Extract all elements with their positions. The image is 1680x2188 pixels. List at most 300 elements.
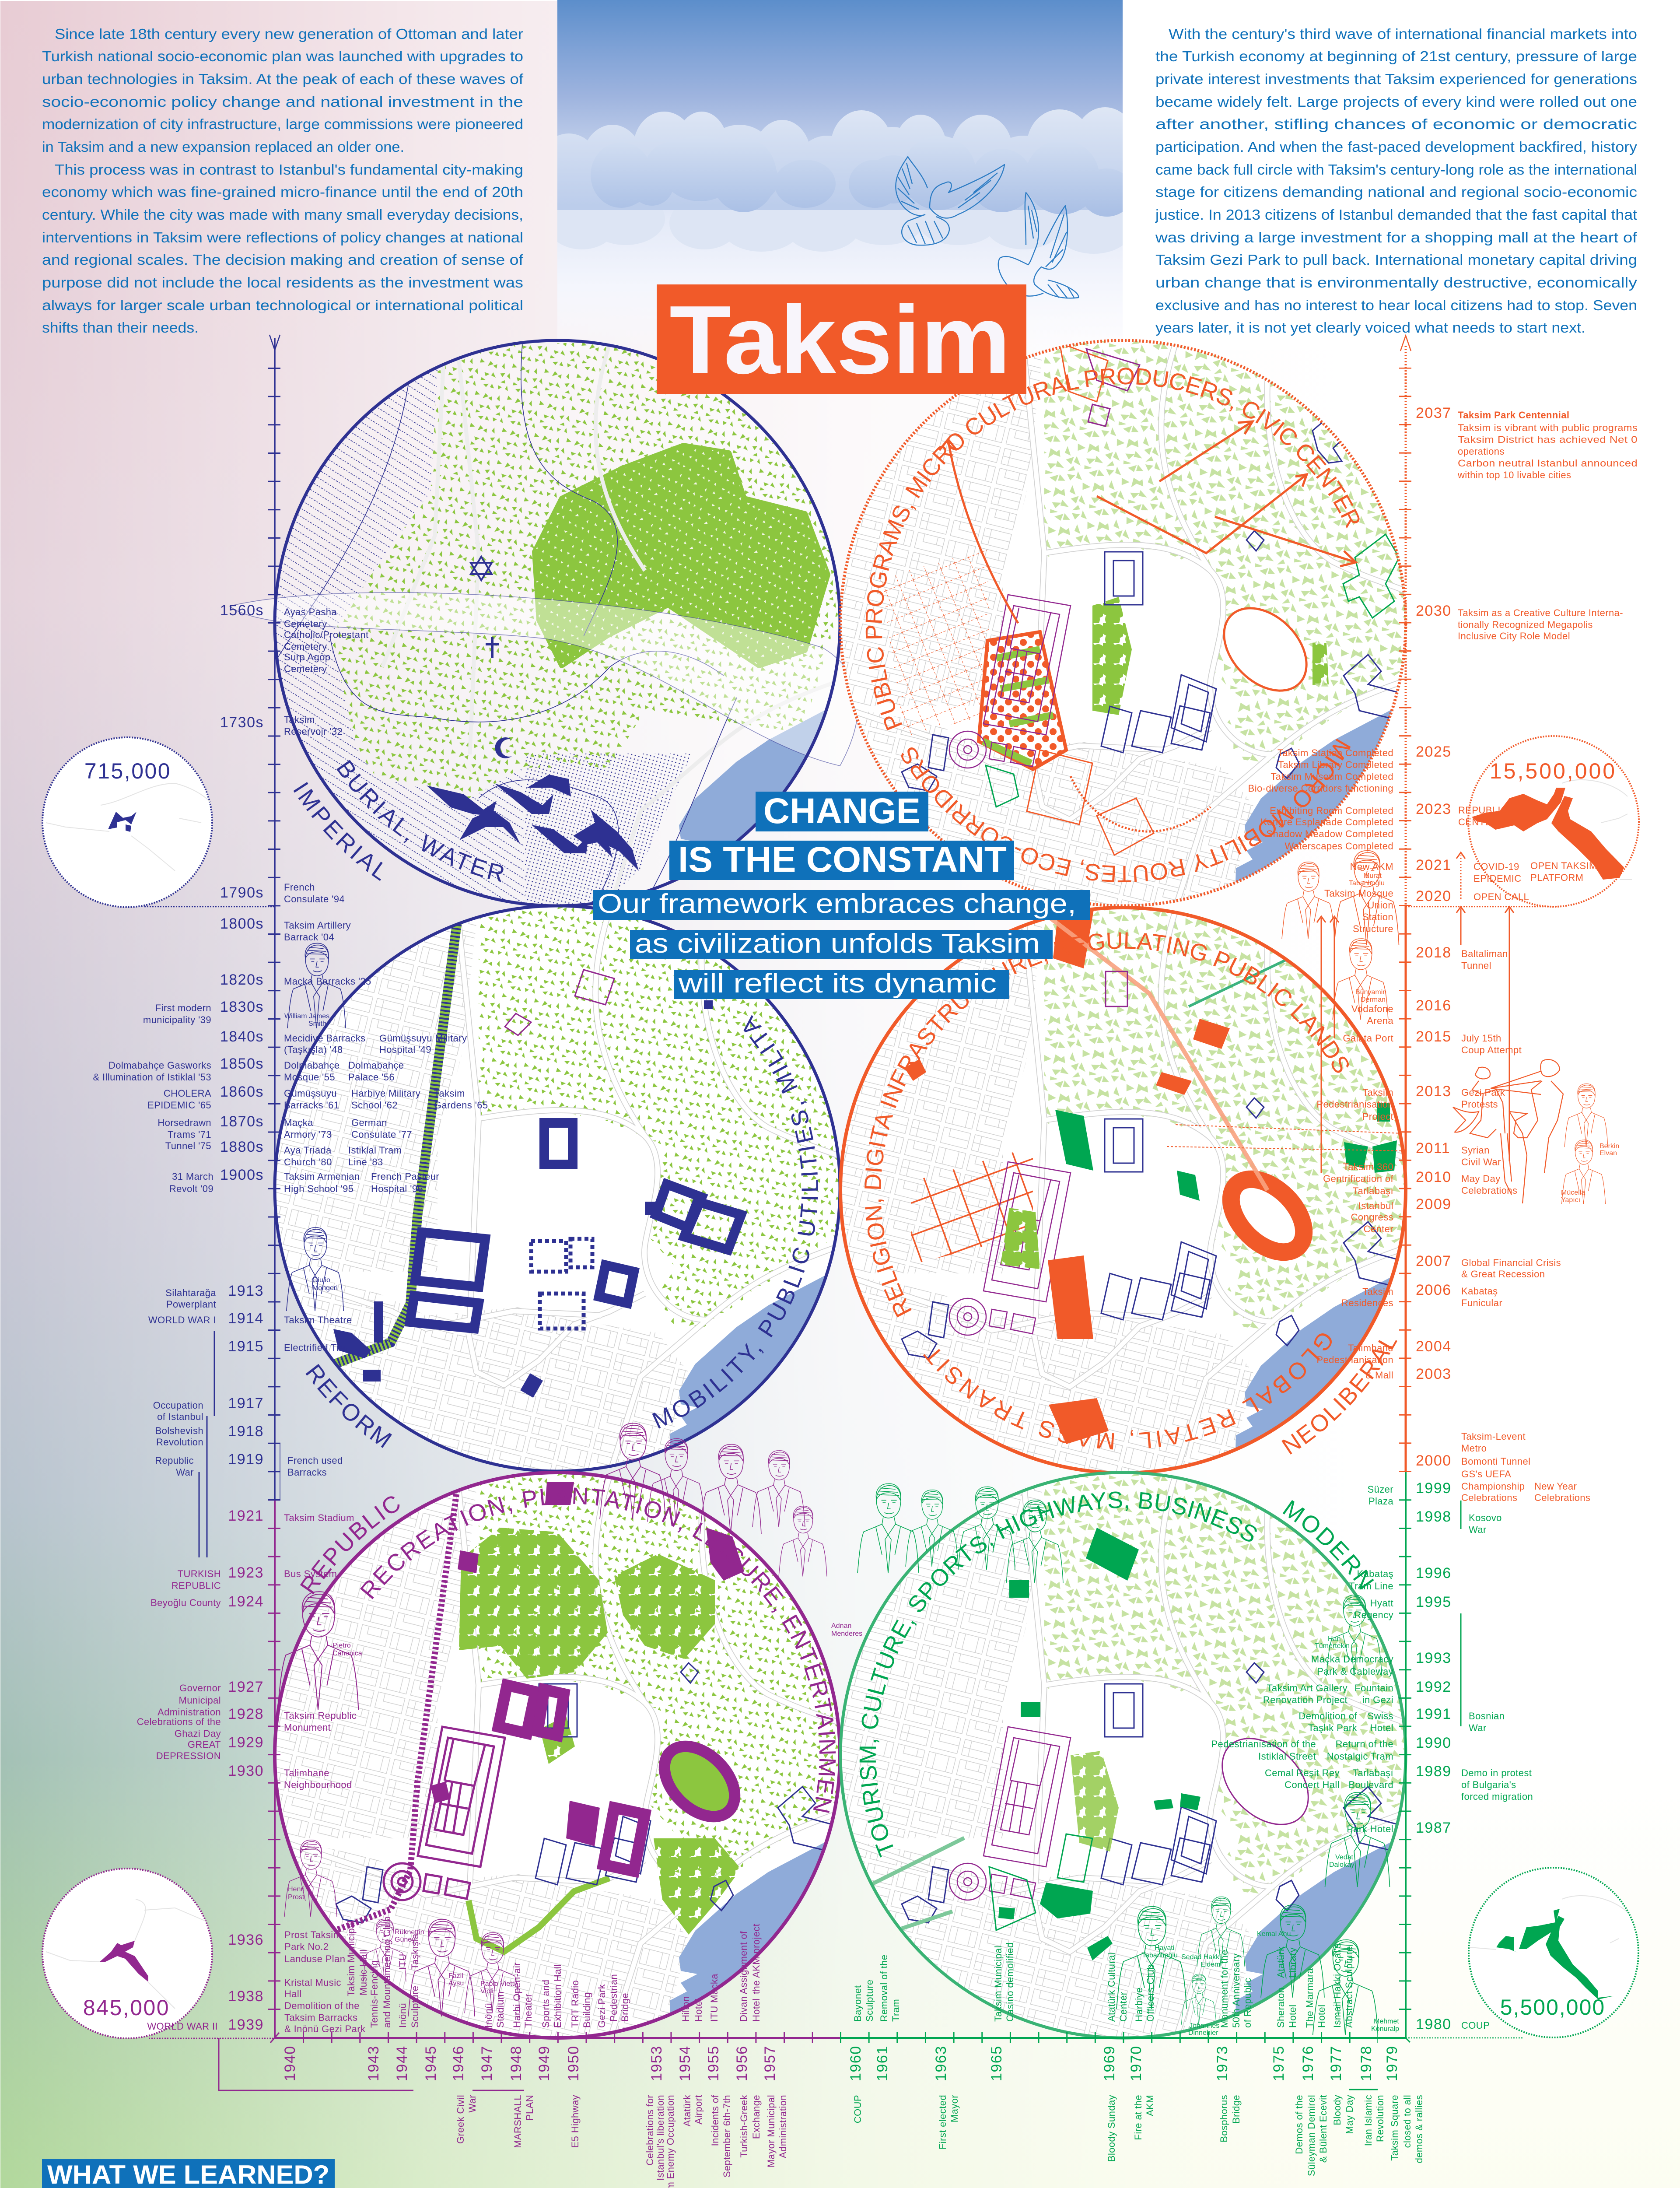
purple outline buildings bbox=[1086, 349, 1140, 426]
rotated years bottom purple: 1948 bbox=[508, 2045, 525, 2081]
timeline years left purple: 1927 bbox=[228, 1679, 264, 1695]
rotated years bottom green: 1970 bbox=[1128, 2045, 1144, 2081]
timeline events left of left axis navy: EPIDEMIC '65 bbox=[147, 1100, 211, 1111]
water bbox=[670, 689, 864, 929]
rotated notes below axis green: Taksim Square bbox=[1389, 2095, 1400, 2161]
portrait names: Menderes bbox=[831, 1630, 862, 1637]
rotated notes below axis green: COUP bbox=[852, 2095, 863, 2123]
timeline years right orange: 2013 bbox=[1416, 1083, 1452, 1100]
rotated years bottom purple: 1954 bbox=[677, 2045, 693, 2081]
rotated events above bottom axis purple: Music Hall bbox=[358, 1950, 369, 1995]
timeline events right of left axis navy: Maçka Barracks '25 bbox=[284, 976, 371, 987]
timeline events right of left axis navy: High School '95 bbox=[284, 1183, 354, 1194]
hatched burial grounds bbox=[273, 339, 525, 908]
timeline years left purple bbox=[228, 1508, 264, 2033]
timeline events left of left axis navy: Trams '71 bbox=[168, 1129, 211, 1140]
timeline years left navy: 1900s bbox=[220, 1167, 264, 1183]
rotated events above bottom axis green: Casino demolified bbox=[1004, 1942, 1015, 2022]
rotated events above bottom axis green: Sculpture bbox=[864, 1979, 875, 2022]
rotated events above bottom axis green: Hotel bbox=[1316, 2005, 1327, 2028]
timeline events left of right axis green: Fountain bbox=[1354, 1683, 1393, 1694]
stadium outline bbox=[1208, 592, 1323, 707]
portrait names: Johannes bbox=[1189, 2022, 1219, 2030]
intro text block left: and regional scales. The decision making and creation of sense of bbox=[42, 252, 524, 268]
timeline years left purple: 1939 bbox=[228, 2016, 264, 2033]
timeline events right of left axis navy: Cemetery bbox=[284, 641, 327, 652]
timeline events purple left: Celebrations of the bbox=[137, 1716, 221, 1727]
timeline events purple right: Hall bbox=[284, 1988, 302, 1999]
rotated notes below axis green: Süleyman Demirel bbox=[1306, 2095, 1317, 2176]
arc text: religion: RELIGION, DIGITA INFRASTRUCTURE, REGULATING PUBLIC LANDS bbox=[860, 927, 1355, 1322]
timeline events right of left axis navy: Armory '73 bbox=[284, 1129, 332, 1140]
frame bbox=[275, 1473, 840, 2038]
rotated events above bottom axis purple: Theater bbox=[523, 1993, 534, 2028]
timeline notes right green: War bbox=[1469, 1722, 1487, 1733]
timeline years left navy: 1917 bbox=[228, 1395, 264, 1412]
portrait names: Tabanlıoğlu bbox=[1349, 880, 1385, 887]
timeline events right of left axis navy: Surp Agop bbox=[284, 652, 330, 663]
intro text block left: This process was in contrast to Istanbul's fundamental city-making bbox=[55, 161, 523, 178]
portrait names: Paolo Vietti bbox=[480, 1980, 516, 1988]
arc text: mobility: MOBILITY, PUBLIC UTILITIES, MILITARY bbox=[0, 0, 823, 1434]
rotated events above bottom axis green: Tram bbox=[890, 1999, 901, 2022]
rotated events above bottom axis purple bbox=[346, 1916, 762, 2028]
timeline years left navy: 1790s bbox=[220, 884, 264, 901]
timeline events left of left axis navy: War bbox=[176, 1467, 194, 1478]
icon: star bbox=[471, 557, 492, 580]
timeline events right of left axis navy: Barrack '04 bbox=[284, 932, 334, 943]
timeline events right of left axis navy: Taksim Theatre bbox=[284, 1315, 352, 1325]
portrait names: William James bbox=[284, 1013, 329, 1020]
timeline events left of right axis orange: Gentrification of bbox=[1323, 1173, 1393, 1184]
timeline notes right orange: GS's UEFA bbox=[1461, 1469, 1511, 1480]
timeline axis bottom bbox=[219, 2033, 1410, 2090]
diagonal orange grid bbox=[880, 549, 992, 737]
timeline notes right orange: OPEN CALL bbox=[1474, 891, 1529, 902]
rotated years bottom purple: 1955 bbox=[705, 2045, 722, 2081]
intro text block right: Taksim Gezi Park to pull back. International monetary capital driving bbox=[1155, 252, 1637, 268]
timeline notes right orange: Protests bbox=[1461, 1099, 1498, 1110]
rotated notes below axis purple: MARSHALL bbox=[512, 2095, 523, 2148]
timeline events left of right axis orange: Taksim Library Completed bbox=[1278, 759, 1393, 770]
timeline events purple right: Taksim Republic bbox=[284, 1710, 357, 1721]
rotated events above bottom axis green: Abstract Sculpture bbox=[1344, 1946, 1354, 2028]
rotated events above bottom axis green: Removal of the bbox=[878, 1954, 889, 2022]
timeline events left of right axis green: Boulevard bbox=[1348, 1779, 1393, 1790]
population bubble 5,500,000: 5,500,000 bbox=[1500, 1995, 1605, 2020]
timeline years right green: 1995 bbox=[1416, 1594, 1452, 1610]
polka tree block bbox=[979, 632, 1066, 769]
intro text block left: century. While the city was made with many small everyday decisions, bbox=[42, 207, 523, 223]
frame bbox=[840, 1473, 1406, 2038]
rotated notes below axis green: Bosphorus bbox=[1218, 2095, 1229, 2142]
rotated notes below axis green: Iran Islamic bbox=[1363, 2095, 1374, 2146]
central message: change is the constant: IS THE CONSTANT bbox=[678, 840, 1007, 880]
rotated events above bottom axis purple: TRT Radio bbox=[570, 1980, 581, 2028]
rotated events above bottom axis green: Harbiye bbox=[1134, 1987, 1144, 2022]
timeline events left of right axis orange: Exhibiting Room Completed bbox=[1270, 805, 1393, 816]
portrait names: Tümertekin bbox=[1315, 1642, 1350, 1650]
timeline years left navy: 1880s bbox=[220, 1139, 264, 1155]
purple outlines bbox=[505, 970, 614, 1035]
central message: change is the constant bbox=[593, 791, 1090, 999]
timeline years right orange: 2020 bbox=[1416, 888, 1452, 905]
solid green buildings bbox=[998, 1528, 1200, 1960]
timeline years right green bbox=[1416, 1480, 1452, 2033]
timeline years left navy: 1560s bbox=[220, 602, 264, 619]
dotted small blocks bbox=[531, 1239, 592, 1329]
timeline notes right green: forced migration bbox=[1461, 1791, 1533, 1802]
timeline years right orange: 2010 bbox=[1416, 1169, 1452, 1185]
timeline events right of left axis navy: Palace '56 bbox=[348, 1072, 395, 1083]
timeline years right orange: 2011 bbox=[1416, 1140, 1450, 1157]
timeline events purple right: Kristal Music bbox=[284, 1977, 341, 1988]
timeline events left of right axis green: Concert Hall bbox=[1284, 1779, 1340, 1790]
timeline events right of left axis navy: Istiklal Tram bbox=[348, 1145, 402, 1156]
rotated events above bottom axis purple: Hilton bbox=[680, 1996, 691, 2022]
green outline buildings bbox=[986, 534, 1399, 807]
timeline events purple right: & Inönü Gezi Park bbox=[284, 2023, 366, 2034]
peach road and lines bbox=[1040, 910, 1267, 1190]
intro text block left: economy which was fine-grained micro-finance until the end of 20th bbox=[42, 184, 523, 200]
intro text block right: came back full circle with Taksim's century-long role as the international bbox=[1155, 161, 1637, 178]
arc text: tourism: TOURISM, CULTURE, SPORTS, HIGHWAYS, BUSINESS bbox=[855, 1487, 1262, 1860]
timeline events purple right: Bus System bbox=[284, 1568, 337, 1579]
timeline notes right orange: Kabataş bbox=[1461, 1286, 1498, 1297]
arc text: global retail: GLOBAL RETAIL, MASS TRANSIT bbox=[917, 1326, 1339, 1455]
timeline years left navy bbox=[220, 602, 264, 1468]
green planting strips bbox=[983, 649, 1053, 763]
timeline notes right orange: Metro bbox=[1461, 1443, 1487, 1454]
timeline notes right orange: Tunnel bbox=[1461, 960, 1491, 971]
rotated years bottom purple: 1943 bbox=[365, 2045, 382, 2081]
timeline events right of left axis navy: Ayas Pasha bbox=[284, 607, 337, 617]
timeline years left navy: 1730s bbox=[220, 714, 264, 731]
intro text block right bbox=[1155, 26, 1638, 336]
timeline events purple right: Prost Taksim bbox=[284, 1929, 341, 1940]
timeline events purple right: Taksim Barracks bbox=[284, 2012, 357, 2023]
icon: crescent bbox=[495, 737, 512, 758]
portrait names: Sedad Hakki bbox=[1181, 1953, 1221, 1961]
intro text block left: modernization of city infrastructure, large commissions were pioneered bbox=[42, 116, 523, 132]
rotated years bottom purple: 1957 bbox=[762, 2045, 778, 2081]
rotated years bottom purple: 1945 bbox=[423, 2045, 439, 2081]
timeline years right orange: 2015 bbox=[1416, 1028, 1452, 1045]
timeline years right orange: 2030 bbox=[1416, 603, 1452, 619]
timeline years right orange: 2023 bbox=[1416, 801, 1452, 817]
portrait names: Henri bbox=[288, 1886, 304, 1893]
frame bbox=[840, 908, 1406, 1473]
rotated events above bottom axis purple: the AKM project bbox=[751, 1924, 762, 1994]
timeline events left of right axis orange: Pedestrianisation bbox=[1316, 1354, 1393, 1365]
intro text block right: after another, stifling chances of economic or democratic bbox=[1155, 116, 1637, 132]
rotated events above bottom axis purple: Taksim Municipal bbox=[346, 1920, 357, 1996]
rotated notes below axis green: Bridge bbox=[1231, 2095, 1242, 2124]
timeline events right of left axis navy: Hospital '96 bbox=[371, 1183, 423, 1194]
rotated years bottom purple: 1953 bbox=[648, 2045, 665, 2081]
portrait names: Kemal Ahu bbox=[1257, 1930, 1291, 1938]
timeline events left of left axis navy: municipality '39 bbox=[143, 1014, 211, 1025]
timeline events right of left axis navy: Line '83 bbox=[348, 1157, 383, 1168]
rotated notes below axis purple: Airport bbox=[693, 2095, 704, 2125]
timeline events right of left axis navy: Taksim Artillery bbox=[284, 920, 351, 931]
timeline events left of left axis navy: Dolmabahçe Gasworks bbox=[108, 1060, 211, 1071]
rotated years bottom green: 1960 bbox=[847, 2045, 864, 2081]
timeline notes right green: of Bulgaria's bbox=[1461, 1779, 1516, 1790]
intro text block right: stage for citizens demanding national and regional socio-economic bbox=[1155, 184, 1637, 200]
timeline notes right orange: Taksim District has achieved Net 0 bbox=[1458, 434, 1638, 445]
timeline events purple left: TURKISH bbox=[178, 1568, 221, 1579]
timeline years right green: 1992 bbox=[1416, 1679, 1452, 1695]
timeline events right of left axis navy: Barracks bbox=[287, 1467, 327, 1478]
portrait names: Berkin bbox=[1600, 1143, 1619, 1150]
timeline events right of left axis navy: Reservoir '32 bbox=[284, 726, 343, 737]
portrait names: Mehmet bbox=[1374, 2018, 1399, 2025]
timeline years right orange: 2025 bbox=[1416, 743, 1452, 760]
portrait names: Canonica bbox=[332, 1650, 362, 1657]
timeline years right orange: 2018 bbox=[1416, 944, 1452, 961]
rotated events above bottom axis green: Library bbox=[1287, 1947, 1298, 1978]
timeline events right of left axis navy: Dolmabahçe bbox=[348, 1060, 404, 1071]
timeline events right of left axis navy: Church '80 bbox=[284, 1157, 332, 1168]
rotated events above bottom axis purple: Bridge bbox=[620, 1993, 630, 2022]
portrait names: Eldem bbox=[1200, 1961, 1220, 1968]
rotated events above bottom axis green: Monument for the bbox=[1219, 1950, 1230, 2028]
portrait names: Violi bbox=[480, 1988, 494, 1995]
population bubble 845,000 bbox=[42, 1869, 275, 2038]
circle map: neoliberal future micro programmes bbox=[839, 339, 1429, 929]
timeline events purple left: Ghazi Day bbox=[175, 1728, 221, 1739]
timeline events right of left axis navy: Gardens '65 bbox=[434, 1100, 488, 1111]
portraits purple bbox=[278, 1423, 827, 2016]
rotated years bottom purple: 1947 bbox=[479, 2045, 495, 2081]
central message: change is the constant: will reflect its dynamic bbox=[678, 968, 997, 999]
timeline events left of right axis orange: Arena bbox=[1367, 1015, 1393, 1026]
timeline events left of left axis navy: Silahtarağa bbox=[165, 1287, 216, 1298]
intro text block right: years later, it is not yet clearly voiced what needs to start next. bbox=[1155, 319, 1586, 336]
portrait names: Adnan bbox=[831, 1622, 851, 1630]
timeline events left of right axis orange: Galata Port bbox=[1343, 1033, 1393, 1044]
timeline notes right orange bbox=[1457, 410, 1638, 1503]
portrait names: Giulio bbox=[312, 1276, 330, 1284]
arc text: public programs: PUBLIC PROGRAMS, MICRO CULTURAL PRODUCERS, CIVIC CENTER bbox=[861, 363, 1366, 734]
timeline events purple right: Park No.2 bbox=[284, 1941, 329, 1952]
timeline events left of left axis navy: Powerplant bbox=[166, 1299, 216, 1310]
central message: change is the constant: Our framework embraces change, bbox=[598, 889, 1076, 919]
timeline years right orange: 2009 bbox=[1416, 1196, 1452, 1213]
timeline events right of left axis navy: Consulate '77 bbox=[351, 1129, 412, 1140]
timeline events left of right axis orange: Istanbul bbox=[1358, 1200, 1393, 1211]
timeline events right of left axis navy: Gümüşsuyu Military bbox=[379, 1033, 467, 1044]
timeline years right green: 1991 bbox=[1416, 1706, 1452, 1722]
timeline notes right orange: Celebrations bbox=[1461, 1185, 1517, 1196]
rotated notes below axis green: First elected bbox=[937, 2095, 948, 2149]
forest flecks bbox=[535, 445, 828, 666]
timeline events left of left axis navy: 31 March bbox=[172, 1171, 214, 1182]
timeline events left of right axis green: in Gezi bbox=[1362, 1694, 1393, 1705]
contour lines bbox=[277, 343, 737, 903]
portraits green bbox=[858, 1484, 1390, 2035]
timeline notes right orange: Taksim Park Centennial bbox=[1458, 410, 1569, 421]
timeline events left of right axis green: Plaza bbox=[1368, 1496, 1393, 1507]
timeline notes right orange: CENTENNIAL bbox=[1458, 817, 1521, 828]
timeline events right of left axis navy: Barracks '61 bbox=[284, 1100, 339, 1111]
timeline events left of right axis green: Renovation Project bbox=[1263, 1694, 1348, 1705]
portrait names: Vedat bbox=[1335, 1854, 1353, 1861]
timeline events left of left axis navy: & Illumination of Istiklal '53 bbox=[93, 1072, 211, 1083]
rotated years bottom green: 1963 bbox=[933, 2045, 949, 2081]
rotated years bottom green: 1976 bbox=[1300, 2045, 1316, 2081]
timeline years left navy: 1850s bbox=[220, 1055, 264, 1072]
tree cluster bbox=[1092, 597, 1132, 715]
portrait names: Mongeri bbox=[312, 1284, 338, 1292]
rotated events above bottom axis purple: Exhibition Hall bbox=[552, 1964, 563, 2028]
timeline years left navy: 1860s bbox=[220, 1083, 264, 1100]
timeline events left of right axis green: Maçka Democracy bbox=[1311, 1654, 1393, 1665]
rotated notes below axis green: Fire at the bbox=[1133, 2095, 1144, 2140]
timeline events purple left: GREAT bbox=[188, 1739, 221, 1750]
timeline events left of right axis green: Pedestrianisation of the bbox=[1211, 1739, 1316, 1750]
timeline notes right orange: Celebrations bbox=[1534, 1492, 1590, 1503]
orange buildings bbox=[1027, 343, 1154, 855]
rotated years bottom green bbox=[847, 2045, 1400, 2081]
icon: cross bbox=[486, 637, 499, 658]
rotated notes below axis purple: Celebrations for bbox=[644, 2095, 655, 2166]
rotated events above bottom axis purple: Harbi Open-air bbox=[511, 1962, 522, 2028]
rotated years bottom green: 1978 bbox=[1358, 2045, 1375, 2081]
portrait names bbox=[284, 872, 1619, 2037]
timeline notes right orange: Taksim-Levent bbox=[1461, 1431, 1526, 1442]
timeline events left of right axis orange: Taksim Mosque bbox=[1324, 888, 1393, 899]
rotated events above bottom axis purple: ITU bbox=[397, 1953, 408, 1970]
rotated notes below axis purple: PLAN bbox=[524, 2095, 535, 2121]
timeline axis left bbox=[199, 335, 280, 2038]
tree forests bbox=[459, 1528, 608, 1679]
portrait names: Murat bbox=[1364, 872, 1382, 880]
rotated notes below axis green: Bloody bbox=[1332, 2095, 1343, 2125]
title: Taksim bbox=[669, 286, 1011, 394]
rotated notes below axis purple: Atatürk bbox=[682, 2094, 693, 2127]
rotated events above bottom axis purple: Sports and bbox=[540, 1980, 551, 2028]
timeline events left of right axis orange: Tarlabaşı bbox=[1353, 1185, 1393, 1196]
rotated notes below axis green: closed to all bbox=[1402, 2095, 1413, 2148]
timeline notes right orange: May Day bbox=[1461, 1173, 1501, 1184]
timeline years left purple: 1938 bbox=[228, 1988, 264, 2005]
timeline notes right orange: within top 10 livable cities bbox=[1457, 470, 1571, 480]
population bubble 715,000: 715,000 bbox=[84, 759, 171, 783]
rotated notes below axis green: AKM bbox=[1144, 2095, 1155, 2116]
timeline events right of left axis navy: Cemetery bbox=[284, 663, 327, 674]
rotated events above bottom axis purple: Sculpture bbox=[410, 1985, 420, 2028]
intro text block left: in Taksim and a new expansion replaced an older one. bbox=[42, 139, 404, 155]
rotated events above bottom axis purple: Inönü bbox=[397, 2003, 408, 2028]
timeline events left of right axis green: Hyatt bbox=[1370, 1598, 1393, 1609]
timeline events left of right axis orange: Pedestrianisation bbox=[1316, 1099, 1393, 1110]
intro text block right: the Turkish economy at beginning of 21st century, pressure of large bbox=[1155, 48, 1637, 64]
population bubble 15,500,000 bbox=[1406, 736, 1639, 907]
timeline years left purple: 1923 bbox=[228, 1564, 264, 1581]
intro text block left: urban technologies in Taksim. At the peak of each of these waves of bbox=[42, 71, 524, 87]
rotated notes below axis green: Bloody Sunday bbox=[1106, 2095, 1117, 2162]
rotated events above bottom axis green: Officers Club bbox=[1145, 1964, 1156, 2022]
timeline years right orange bbox=[1416, 405, 1452, 1469]
timeline years right green: 1999 bbox=[1416, 1480, 1452, 1497]
upper navy block bbox=[1312, 417, 1348, 463]
icon: two doves bbox=[896, 157, 1078, 298]
foliage speckle bbox=[331, 343, 842, 798]
timeline events left of right axis green bbox=[1211, 1484, 1393, 1834]
timeline events purple right: Taksim Stadium bbox=[284, 1512, 354, 1523]
timeline events right of left axis navy: Mecidiye Barracks bbox=[284, 1033, 366, 1044]
timeline events left of left axis navy: Tunnel '75 bbox=[165, 1140, 211, 1151]
rotated events above bottom axis green: Center bbox=[1118, 1992, 1129, 2022]
timeline notes right green: COUP bbox=[1461, 2020, 1490, 2031]
timeline notes right orange: tionally Recognized Megapolis bbox=[1458, 619, 1593, 630]
timeline events left of right axis orange: Taksim 360 bbox=[1343, 1161, 1393, 1172]
rotated events above bottom axis green: Atatürk Cultural bbox=[1106, 1953, 1117, 2022]
portrait names: Fazil bbox=[448, 1972, 463, 1980]
timeline events right of left axis navy: Cemetery bbox=[284, 618, 327, 629]
intro text block left: Turkish national socio-economic plan was launched with upgrades to bbox=[42, 48, 523, 64]
timeline events left of right axis orange: Center bbox=[1364, 1224, 1393, 1234]
timeline events left of right axis orange: Bio-diverse Corridors functioning bbox=[1248, 783, 1393, 794]
timeline events left of left axis navy: of Istanbul bbox=[157, 1411, 203, 1422]
timeline events left of right axis orange: Residences bbox=[1341, 1297, 1393, 1308]
timeline years right orange: 2003 bbox=[1416, 1366, 1452, 1382]
timeline events left of right axis orange: Taksim Museum Completed bbox=[1270, 771, 1393, 782]
rotated notes below axis purple: Exchange bbox=[751, 2095, 762, 2139]
timeline events left of left axis navy: Revolution bbox=[156, 1437, 203, 1448]
portraits navy bbox=[287, 943, 346, 1311]
rotated years bottom purple: 1944 bbox=[394, 2045, 410, 2081]
timeline years left navy: 1919 bbox=[228, 1451, 264, 1468]
circle map: republic era bbox=[273, 1471, 864, 2062]
translucent lens band bbox=[230, 593, 858, 766]
rotated events above bottom axis green: Ismail Hakki Ocal's bbox=[1332, 1943, 1343, 2028]
timeline events left of right axis green: Süzer bbox=[1368, 1484, 1393, 1495]
timeline years left navy: 1800s bbox=[220, 915, 264, 932]
timeline events left of right axis green: Tram Line bbox=[1349, 1581, 1393, 1592]
timeline events purple left bbox=[137, 1568, 221, 2032]
portrait names: Bünyamin bbox=[1355, 989, 1386, 996]
rotated notes below axis green: May Day bbox=[1344, 2095, 1355, 2134]
timeline notes right orange: Coup Attempt bbox=[1461, 1045, 1522, 1055]
timeline notes right green: War bbox=[1469, 1524, 1487, 1535]
timeline events left of right axis orange: Talimhane bbox=[1348, 1343, 1393, 1353]
portrait names: Smith bbox=[308, 1020, 326, 1027]
rotated events above bottom axis purple: Taşkışla bbox=[410, 1933, 420, 1970]
rotated notes below axis green: Demos of the bbox=[1294, 2095, 1305, 2154]
timeline events left of right axis orange: Waterscapes Completed bbox=[1285, 841, 1393, 852]
frame bbox=[275, 906, 840, 1471]
timeline events left of right axis green: Park & Cableway bbox=[1317, 1666, 1393, 1677]
icon: storks in flight bbox=[427, 775, 639, 871]
timeline events left of left axis navy: First modern bbox=[155, 1003, 211, 1013]
rotated events above bottom axis green: Atatürk bbox=[1275, 1946, 1286, 1978]
intro text block left: purpose did not include the local residents as the investment was bbox=[42, 274, 523, 291]
rotated events above bottom axis green: 50th Anniversary bbox=[1231, 1953, 1242, 2028]
timeline events left of right axis orange: Vodafone bbox=[1351, 1003, 1393, 1014]
trees bbox=[1071, 1751, 1119, 1851]
rotated events above bottom axis purple: Assignment of bbox=[738, 1931, 749, 1994]
sky panel with clouds bbox=[557, 0, 1123, 322]
timeline events left of right axis green: Taşlık Park bbox=[1308, 1722, 1358, 1733]
timeline events left of left axis navy: WORLD WAR I bbox=[148, 1315, 216, 1325]
timeline events left of left axis navy: Horsedrawn bbox=[158, 1117, 211, 1128]
portrait names: Güney bbox=[395, 1936, 415, 1943]
timeline events left of right axis green: Return of the bbox=[1336, 1739, 1393, 1750]
timeline events purple left: Governor bbox=[179, 1683, 221, 1694]
